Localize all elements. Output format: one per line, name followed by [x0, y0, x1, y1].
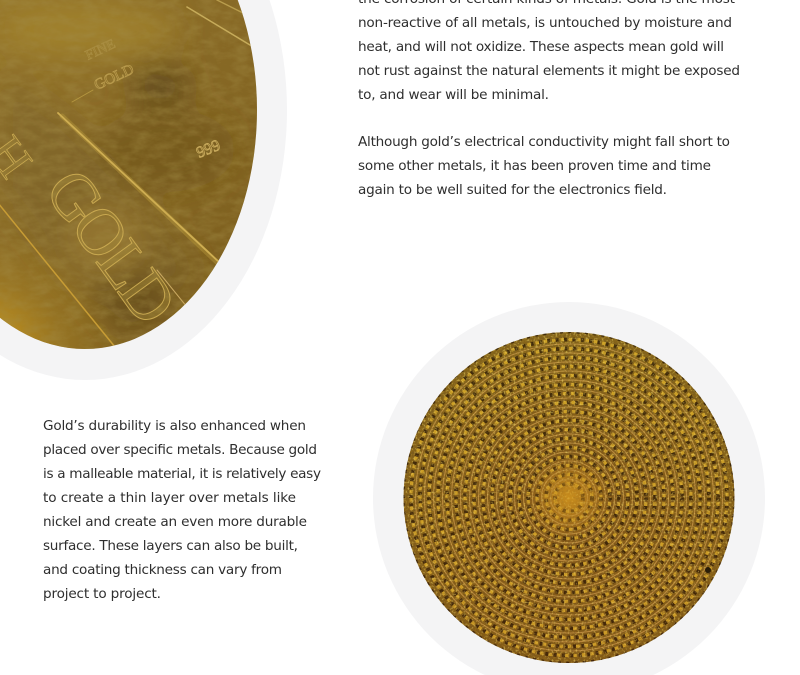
text block: durability over metals: and coating thickness can vary from: [43, 562, 282, 578]
text block: durability over metals: placed over specific metals. Because gold: [43, 442, 317, 458]
dark weave gaps: [403, 332, 735, 664]
text block: durability over metals: [43, 418, 321, 602]
halo: gold bars image: [0, 0, 287, 380]
paragraph: corrosion resistance: to, and wear will be minimal.: [358, 87, 549, 103]
text block: durability over metals: to create a thin layer over metals like: [43, 490, 296, 506]
text block: durability over metals: Gold’s durability is also enhanced when: [43, 418, 306, 434]
engraved lettering: GOLD: [31, 156, 191, 338]
engraved lettering: 999: [194, 137, 223, 162]
text block: durability over metals: is a malleable material, it is relatively easy: [43, 466, 321, 482]
paragraph: corrosion resistance: [358, 0, 740, 103]
engraved lettering: GOLD: [92, 61, 137, 94]
paragraph: corrosion resistance: heat, and will not oxidize. These aspects mean gold will: [358, 39, 724, 55]
halo: gold disc image: [373, 302, 765, 675]
bar shading: [0, 2, 235, 340]
engraved lettering: FINE: [83, 37, 118, 64]
paragraph: corrosion resistance: not rust against the natural elements it might be exposed: [358, 63, 740, 79]
paragraph: electrical conductivity: again to be well suited for the electronics field.: [358, 182, 667, 198]
ring separators: [416, 344, 722, 651]
paragraph: electrical conductivity: Although gold’s electrical conductivity might fall short to: [358, 134, 730, 150]
bar edges: [0, 0, 250, 347]
text block: durability over metals: surface. These layers can also be built,: [43, 538, 298, 554]
paragraph: electrical conductivity: [358, 134, 730, 198]
text block: corrosion and electronics: [358, 0, 740, 198]
image: gold bars: [0, 0, 260, 350]
text block: durability over metals: nickel and create an even more durable: [43, 514, 307, 530]
image: woven gold disc: [400, 330, 740, 666]
paragraph: corrosion resistance: non-reactive of all metals, is untouched by moisture and: [358, 15, 732, 31]
bright weave links: [411, 340, 727, 656]
paragraph: electrical conductivity: some other metals, it has been proven time and time: [358, 158, 711, 174]
text block: durability over metals: project to project.: [43, 586, 161, 602]
engraved lettering: [0, 37, 223, 338]
